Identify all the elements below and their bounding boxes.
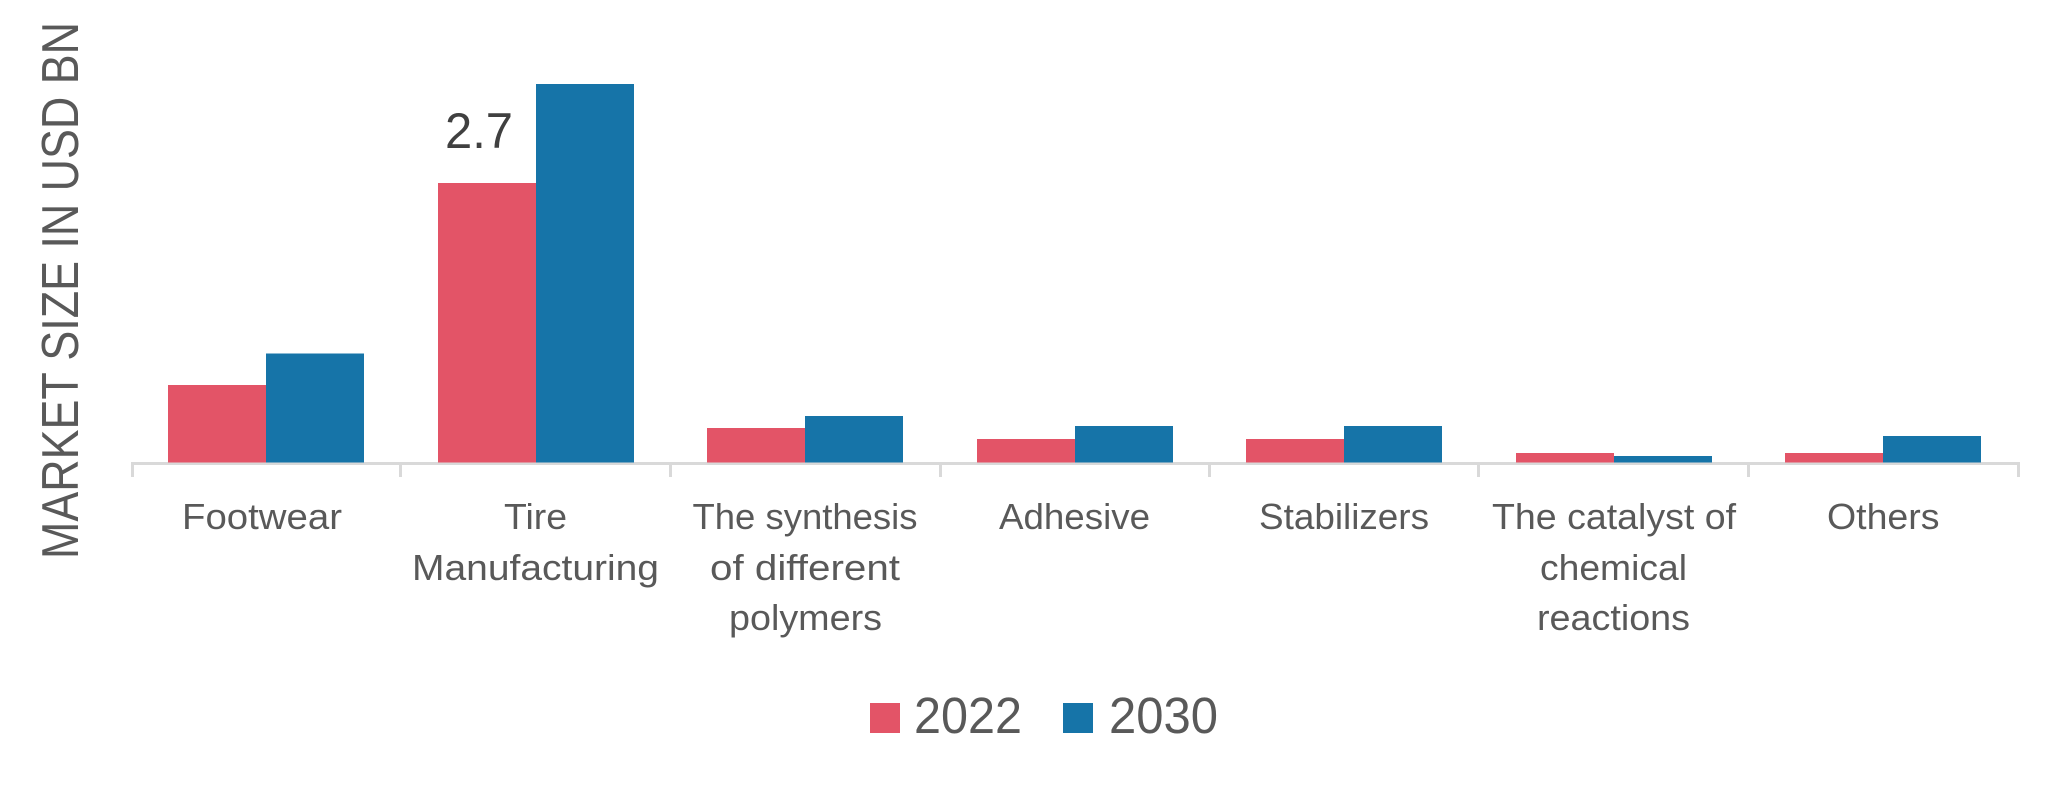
bars: Others	[1785, 436, 1981, 462]
bars: The catalyst of chemical reactions	[1516, 453, 1712, 462]
category label: The synthesis of different polymers	[692, 496, 918, 638]
legend item: 2030: 2030	[1109, 687, 1218, 744]
legend	[870, 687, 1218, 744]
category label: Adhesive: Adhesive	[999, 496, 1150, 537]
bars: Tire Manufacturing	[438, 84, 634, 462]
category label: Others: Others	[1827, 496, 1940, 537]
category label: Stabilizers: Stabilizers	[1259, 496, 1429, 537]
legend item: 2022: 2022	[914, 687, 1022, 744]
bars: Stabilizers	[1246, 426, 1442, 462]
category label: The synthesis of different polymers: The synthesis	[692, 496, 918, 537]
legend item: 2022	[870, 687, 1022, 744]
category label: Tire Manufacturing	[412, 496, 659, 588]
category label: Tire Manufacturing: Manufacturing	[412, 547, 659, 588]
category label: The catalyst of chemical reactions: The catalyst of	[1492, 496, 1737, 537]
category label: Footwear: Footwear	[182, 496, 342, 537]
category label: The catalyst of chemical reactions: chemical	[1540, 547, 1687, 588]
category label: The synthesis of different polymers: of different	[710, 547, 900, 588]
category label: The catalyst of chemical reactions	[1492, 496, 1737, 638]
x axis with ticks	[131, 462, 2020, 477]
bars: Adhesive	[977, 426, 1173, 462]
bars: Footwear	[168, 354, 364, 462]
data label: 2.7: 2.7	[445, 103, 513, 159]
category label: The catalyst of chemical reactions: reactions	[1537, 597, 1690, 638]
bars: The synthesis of different polymers	[707, 416, 903, 462]
category label: Tire Manufacturing: Tire	[504, 496, 567, 537]
category label: The synthesis of different polymers: polymers	[729, 597, 882, 638]
legend item: 2030	[1063, 687, 1218, 744]
